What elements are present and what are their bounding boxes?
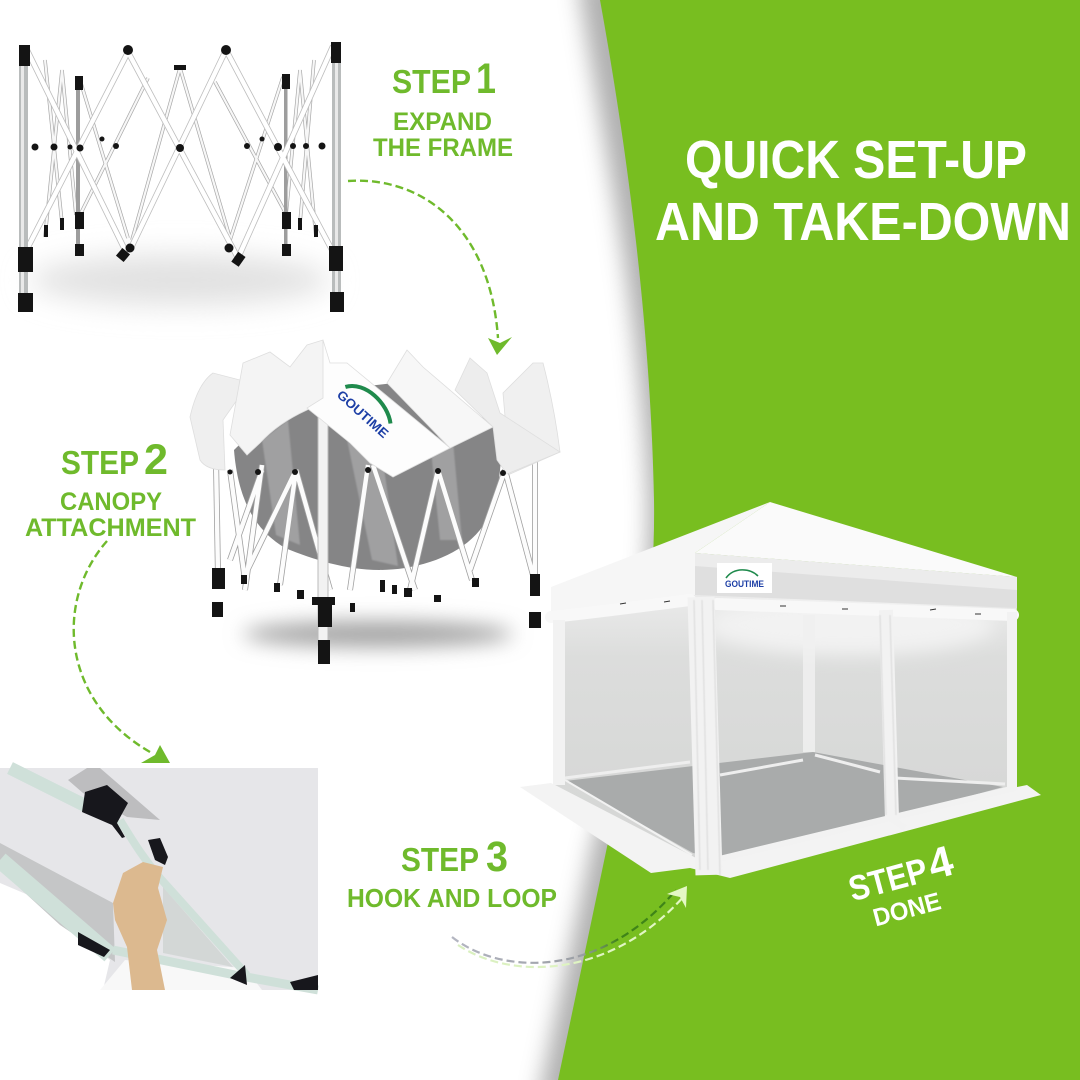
step 3 illustration: hook and loop photo: [0, 768, 318, 990]
green panel shadow: [538, 0, 700, 1080]
step 2 label: 2: [144, 436, 168, 484]
step 1 label: 1: [476, 55, 496, 103]
back posts: [76, 78, 80, 256]
green background panel: [558, 0, 1080, 1080]
step 1 label: STEP: [392, 63, 471, 100]
step 2 label: ATTACHMENT: [25, 514, 196, 542]
canopy logo: GOUTIME: [334, 387, 392, 441]
mesh interior: [553, 590, 1017, 860]
title: QUICK SET-UP: [685, 130, 1027, 190]
valance ties: [620, 601, 981, 614]
front posts: [19, 50, 28, 312]
step 1 label: THE FRAME: [373, 134, 513, 162]
canopy logo: [334, 377, 401, 441]
shaded canopy underside: [0, 843, 115, 962]
arrow: step 2 to step 3: [74, 541, 170, 763]
step 1 label: EXPAND: [393, 108, 492, 136]
front scissors: [27, 46, 333, 258]
step 3 label: HOOK AND LOOP: [347, 883, 557, 913]
tent logo tag: GOUTIME: [725, 579, 764, 589]
step 4 label: 4: [923, 837, 959, 890]
white poles and scissors: [216, 460, 535, 590]
hand holding tube: [113, 862, 167, 990]
frame tubes: [0, 768, 318, 990]
ground shadow: [243, 621, 513, 647]
silver canopy underside: [234, 380, 501, 570]
photo backdrop: [0, 768, 318, 990]
white cut-away corner: [0, 883, 110, 990]
canopy white panels: [190, 340, 560, 477]
arrow: step 1 to step 2: [348, 181, 512, 355]
step 2 label: CANOPY: [60, 488, 162, 516]
lighter mesh at top of back wall: [705, 595, 995, 655]
step 3 label: [347, 833, 557, 913]
side and back scissors outline: [45, 60, 316, 240]
frame floor shadow: [30, 254, 330, 306]
front pole: [318, 405, 328, 645]
step 3 label: STEP: [401, 841, 479, 878]
step 2 label: [25, 436, 196, 542]
black brackets: [78, 785, 318, 990]
step 4 illustration: finished tent: [520, 502, 1041, 878]
mesh panel frames: [559, 597, 1015, 875]
step 2 illustration: frame with canopy: [190, 340, 560, 664]
step 1 label: [373, 55, 513, 162]
back corner seam: [803, 615, 815, 752]
black fittings: [212, 467, 541, 664]
floor skirt: [520, 783, 1041, 878]
step 4 label: STEP: [844, 851, 932, 909]
tent logo tag: [717, 563, 772, 593]
step 1 illustration: expanded frame: [18, 42, 344, 312]
step 2 label: STEP: [61, 444, 139, 481]
arrow: step 3 to step 4: [452, 886, 687, 967]
grey floor: [565, 752, 1003, 857]
black plastic joints: [18, 42, 344, 312]
roof: [695, 502, 1017, 577]
step 4 label: [843, 837, 959, 932]
step 3 label: 3: [486, 833, 508, 881]
zipper shading: [694, 600, 896, 875]
title: [655, 130, 1071, 252]
step 4 label: DONE: [870, 887, 944, 932]
rolled valance: [551, 600, 1013, 617]
